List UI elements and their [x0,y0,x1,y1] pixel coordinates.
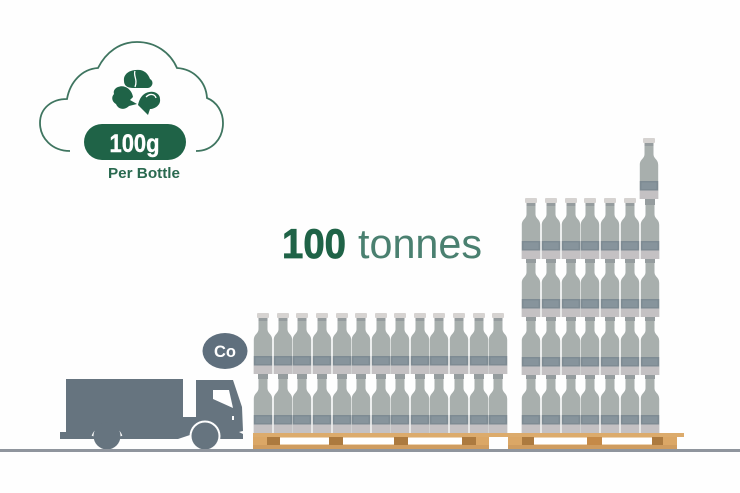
right bottle stack [522,138,659,433]
emission bubble [202,333,248,369]
row 3 [522,314,659,375]
bottom planks [253,445,489,449]
row 4 [522,372,659,433]
cab window [213,390,233,408]
cab marker light [232,416,234,420]
right wheel [190,420,220,452]
value: 100g: 100g [110,130,160,158]
truck [60,379,243,452]
row 1 [522,198,659,259]
pallets [253,433,684,449]
right pallet body [508,437,677,449]
top plank [253,433,684,437]
pallet blocks [267,437,663,445]
left bottle stack [254,313,507,433]
label: Co: Co [214,343,236,361]
title: 100 tonnes: tonnes [358,220,482,267]
top single bottle [640,138,658,199]
icon: cloud badge [40,42,223,182]
left wheel [92,422,122,450]
cloud outline [40,42,223,151]
title: 100 tonnes [282,220,482,267]
top row [254,313,507,374]
left pallet body [253,437,489,449]
truck body [60,379,243,439]
bottom row [254,372,507,433]
pallet gaps [280,438,652,444]
icon: recycling symbol [112,70,160,115]
label: per bottle: Per Bottle [108,165,180,182]
row 2 [522,256,659,317]
value pill [84,124,186,160]
title: 100 tonnes: 100 [282,220,346,267]
ground line [0,449,740,452]
